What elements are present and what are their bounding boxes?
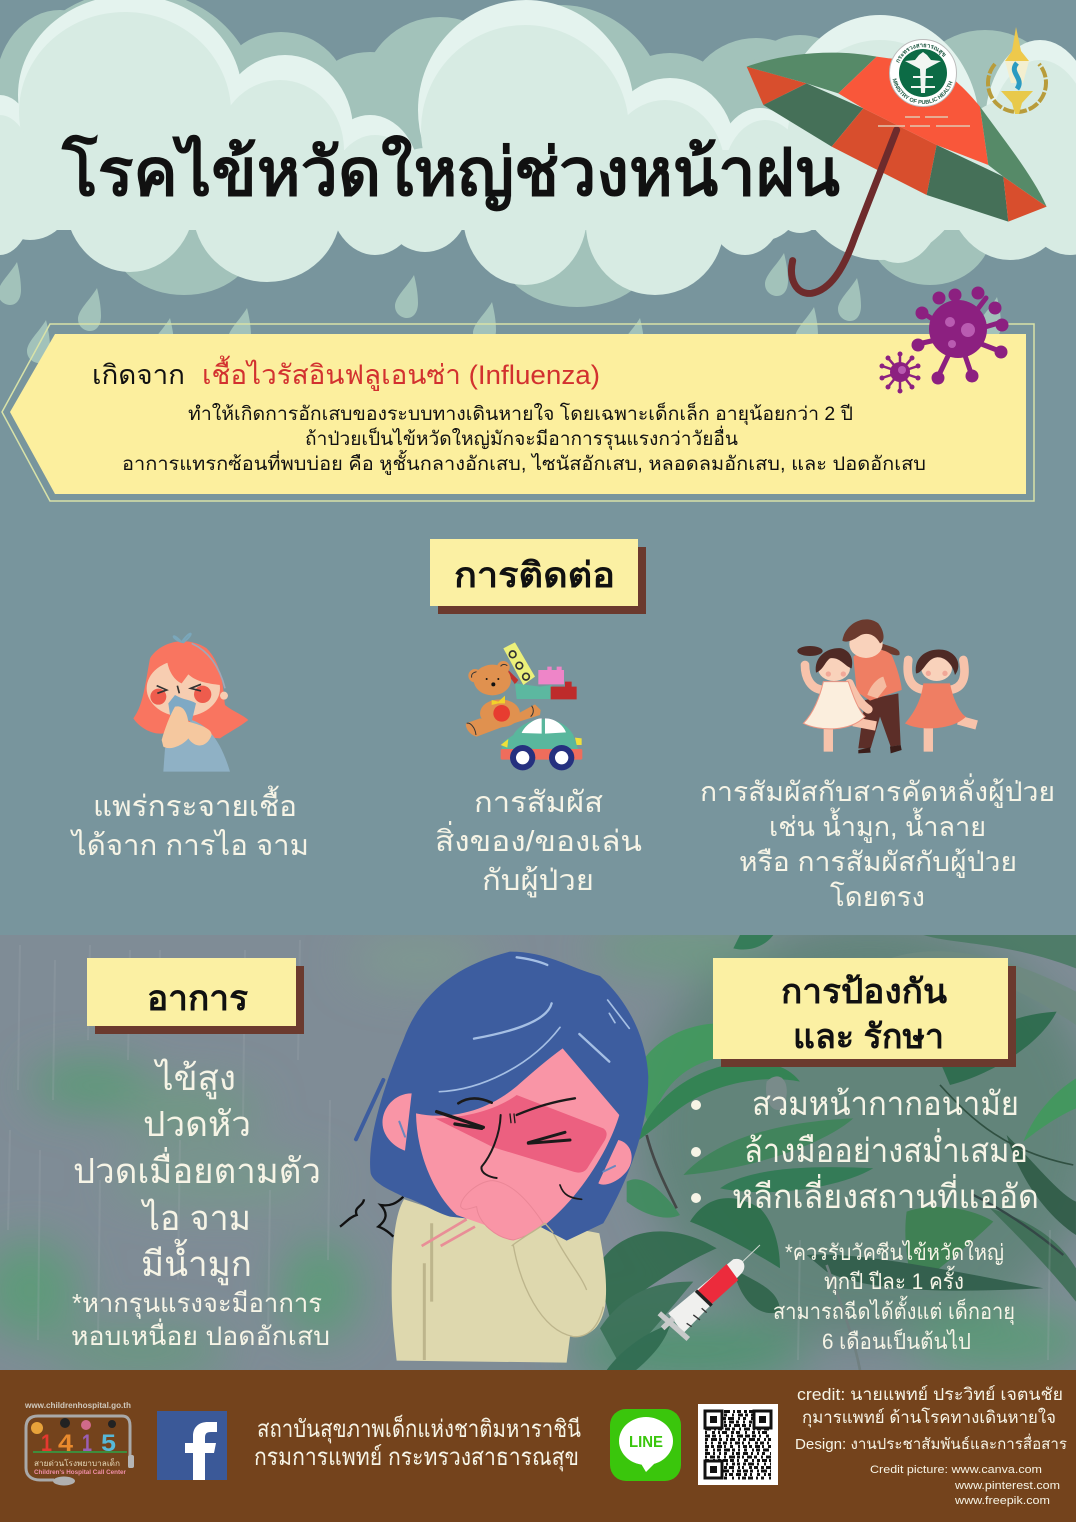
- text: credits: [795, 1385, 1067, 1507]
- banner heading: เชื้อไวรัสอินฟลูเอนซ่า (Influenza): [202, 355, 600, 391]
- rainy photo background: [0, 920, 1076, 1385]
- note: vaccination: [773, 1240, 1015, 1354]
- text: credits: Credit picture: www.canva.com: [870, 1464, 1042, 1476]
- icon: virus: [880, 286, 1008, 394]
- text: contact with secretions: เช่น น้ำมูก, น้ำลาย: [769, 807, 986, 843]
- cough marks: [340, 1197, 582, 1238]
- text: spread by coughing: แพร่กระจายเชื้อ: [93, 785, 297, 823]
- text: contact with secretions: หรือ การสัมผัสกับผู้ป่วย: [739, 847, 1017, 878]
- note: vaccination: 6 เดือนเป็นต้นไป: [822, 1327, 971, 1354]
- logo: ministry of public health: กระทรวงสาธารณสุข: [896, 44, 946, 63]
- text: institute name: สถาบันสุขภาพเด็กแห่งชาติมหาราชินี: [257, 1414, 581, 1444]
- QR code: [698, 1404, 778, 1485]
- icon: line: [610, 1409, 681, 1481]
- illustration: coughing woman: [340, 952, 648, 1363]
- logo caption: [878, 117, 970, 126]
- list: symptoms: ปวดหัว: [143, 1105, 251, 1144]
- list: prevention: หลีกเลี่ยงสถานที่แออัด: [732, 1174, 1039, 1215]
- blush band: [435, 1095, 607, 1173]
- icon: syringe: [659, 1245, 760, 1339]
- body: [392, 1199, 606, 1363]
- footer: [0, 1370, 1076, 1522]
- text: credits: credit: นายแพทย์ ประวิทย์ เจตนชัย: [797, 1385, 1063, 1404]
- list: symptoms: ปวดเมื่อยตามตัว: [73, 1147, 321, 1191]
- icon: umbrella: [747, 53, 1047, 293]
- text: spread by coughing: ได้จาก การไอ จาม: [70, 828, 309, 862]
- heading: transmission: การติดต่อ: [454, 556, 615, 595]
- text: credits: www.freepik.com: [954, 1495, 1050, 1507]
- icon: sneezing girl: [133, 634, 248, 772]
- banner description: ทำให้เกิดการอักเสบของระบบทางเดินหายใจ โดยเฉพาะเด็กเล็ก อายุน้อยกว่า 2 ปี: [188, 401, 853, 426]
- list: symptoms: มีน้ำมูก: [141, 1238, 252, 1285]
- list: symptoms: ไอ จาม: [140, 1198, 251, 1238]
- text: contact with secretions: การสัมผัสกับสารคัดหลั่งผู้ป่วย: [700, 773, 1055, 808]
- text: touching objects: กับผู้ป่วย: [482, 865, 594, 898]
- icon: facebook: [157, 1411, 227, 1480]
- note: severe symptoms: [71, 1288, 330, 1351]
- hand: [461, 1181, 543, 1240]
- heading: symptoms: [87, 958, 304, 1034]
- ears: [382, 1093, 412, 1151]
- list: symptoms: ไข้สูง: [153, 1058, 236, 1099]
- logo: hospital call center 1415: 1: [41, 1430, 52, 1457]
- heading: prevention and treatment: [713, 958, 1016, 1067]
- logo: hospital call center 1415: สายด่วนโรงพยาบาลเด็ก: [34, 1458, 120, 1468]
- logo: hospital call center 1415: 4: [58, 1430, 74, 1457]
- icon: mother and children: [797, 619, 977, 753]
- logo: ministry of public health: [889, 39, 957, 107]
- plant leaves: [597, 935, 1076, 1385]
- logo: department seal: [988, 27, 1046, 114]
- banner description: อาการแทรกซ้อนที่พบบ่อย คือ หูชั้นกลางอักเสบ, ไซนัสอักเสบ, หลอดลมอักเสบ, และ ปอดอักเสบ: [122, 450, 926, 475]
- text: contact with secretions: โดยตรง: [830, 882, 925, 912]
- logo: hospital call center 1415: www.childrenhospital.go.th: [24, 1401, 131, 1410]
- text: institute name: กรมการแพทย์ กระทรวงสาธารณสุข: [254, 1443, 579, 1472]
- logo: hospital call center 1415: 1: [82, 1430, 92, 1457]
- heading: transmission: [430, 539, 646, 614]
- text: credits: กุมารแพทย์ ด้านโรคทางเดินหายใจ: [802, 1407, 1056, 1428]
- heading: symptoms: อาการ: [147, 979, 248, 1018]
- note: severe symptoms: *หากรุนแรงจะมีอาการ: [72, 1288, 322, 1319]
- icon: line: LINE: [629, 1434, 663, 1451]
- icon: toys: [466, 642, 582, 770]
- list: symptoms: [73, 1058, 321, 1285]
- note: severe symptoms: หอบเหนื่อย ปอดอักเสบ: [71, 1318, 330, 1351]
- banner description: [122, 401, 926, 475]
- logo: hospital call center 1415: [24, 1401, 134, 1486]
- hair: [370, 952, 648, 1241]
- facial lines: [437, 1098, 582, 1199]
- title: โรคไข้หวัดใหญ่ช่วงหน้าฝน: [61, 133, 840, 211]
- logo: ministry of public health: MINISTRY OF PUBLIC HEALTH: [892, 78, 952, 104]
- rain drops: [0, 253, 1001, 363]
- panel: cause banner: [2, 324, 1034, 501]
- text: contact with secretions: [700, 773, 1055, 912]
- text: credits: www.pinterest.com: [954, 1480, 1060, 1492]
- heading: prevention and treatment: การป้องกัน: [781, 973, 947, 1011]
- logo: hospital call center 1415: Children's Hospital Call Center: [34, 1470, 127, 1476]
- text: touching objects: การสัมผัส: [474, 787, 603, 819]
- banner description: ถ้าป่วยเป็นไข้หวัดใหญ่มักจะมีอาการรุนแรงกว่าวัยอื่น: [305, 425, 738, 451]
- list: prevention: ล้างมืออย่างสม่ำเสมอ: [744, 1128, 1028, 1169]
- face: [416, 1048, 619, 1235]
- hair highlights: [399, 957, 629, 1172]
- list: prevention: [691, 1085, 1039, 1215]
- logo: hospital call center 1415: 5: [101, 1430, 116, 1457]
- text: touching objects: [435, 787, 642, 898]
- banner heading: [92, 355, 600, 391]
- note: vaccination: *ควรรับวัคซีนไข้หวัดใหญ่: [785, 1240, 1004, 1265]
- note: vaccination: ทุกปี ปีละ 1 ครั้ง: [824, 1266, 964, 1295]
- note: vaccination: สามารถฉีดได้ตั้งแต่ เด็กอายุ: [773, 1296, 1015, 1325]
- text: credits: Design: งานประชาสัมพันธ์และการสื่อสาร: [795, 1433, 1067, 1453]
- heading: prevention and treatment: และ รักษา: [793, 1018, 944, 1056]
- list: prevention: สวมหน้ากากอนามัย: [752, 1085, 1019, 1122]
- clouds: [0, 0, 1076, 307]
- text: touching objects: สิ่งของ/ของเล่น: [435, 821, 642, 858]
- banner heading: เกิดจาก: [92, 360, 185, 390]
- text: spread by coughing: [70, 785, 309, 862]
- text: institute name: [254, 1414, 581, 1472]
